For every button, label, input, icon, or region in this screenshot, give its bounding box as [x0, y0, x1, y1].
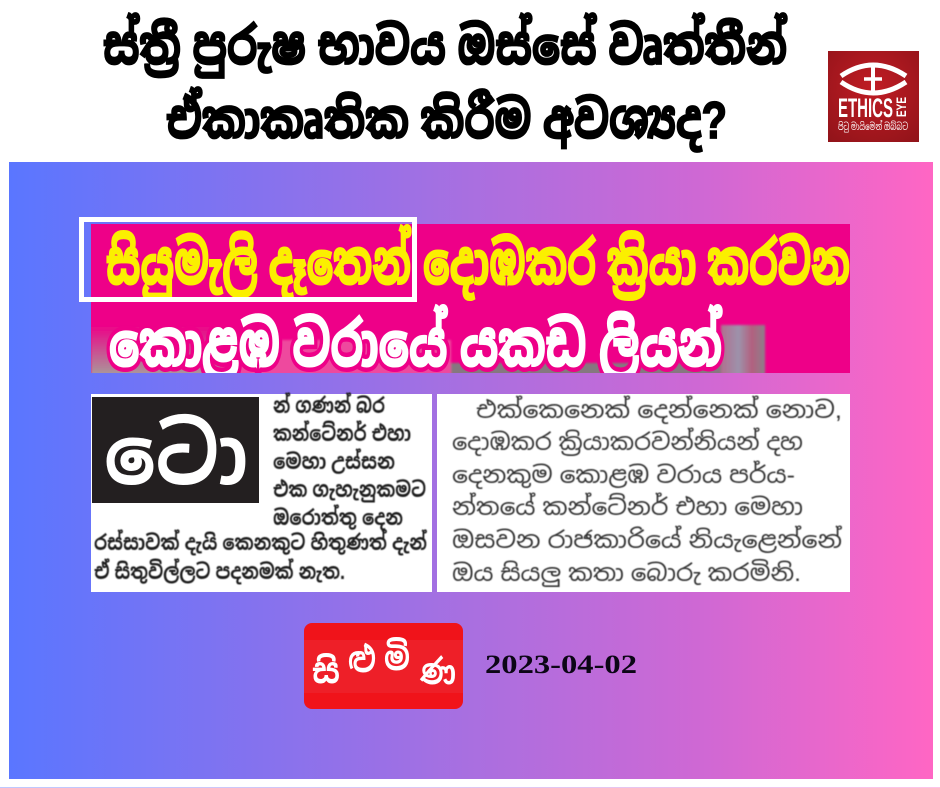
- article text: ඒ සිතුවිල්ලට පදනමක් නැත.: [94, 558, 345, 585]
- gradient panel: [9, 162, 933, 779]
- logo side word: EYE: [893, 97, 909, 117]
- article text: මෙහා උස්සන: [273, 448, 395, 474]
- headline line 2 outline: කොළඹ වරායේ යකඩ ලියන්: [109, 305, 722, 381]
- newspaper name: මි: [384, 637, 410, 678]
- newspaper name: [312, 637, 456, 692]
- article text: ඔසවන රාජකාරියේ නියැළෙන්නේ: [452, 524, 843, 553]
- article text: එක ගැහැනුකමට: [273, 478, 426, 503]
- article text: ඔරොත්තු දෙන: [273, 504, 403, 531]
- date: 2023-04-02: [485, 650, 637, 679]
- headline line 2: කොළඹ වරායේ යකඩ ලියන්: [109, 305, 722, 381]
- logo: newspaper: [304, 623, 463, 709]
- logo tagline: පිටු මායිමෙන් ඔබ්බට: [838, 120, 908, 133]
- article text: න්තයේ කන්ටේනර් එහා මෙහා: [452, 491, 803, 520]
- article text: න් ගණන් බර: [273, 392, 385, 418]
- headline line 1: සියුමැලි දෑතෙන්: [106, 225, 411, 300]
- logo: Ethics Eye: [828, 51, 919, 142]
- highlight box: [82, 220, 414, 300]
- article text: රස්සාවක් දැයි කෙනකුට හිතුණත් දැන්: [94, 529, 427, 556]
- article text: ඔය සියලු කතා බොරු කරමිනි.: [452, 559, 801, 587]
- title: ඒකාකෘතික කිරීම අවශ්‍යද?: [166, 87, 727, 152]
- headline background: [91, 224, 850, 373]
- bottom strip: [0, 787, 940, 788]
- icon: eye: [841, 65, 906, 93]
- title: [103, 13, 787, 152]
- article text: කන්ටේනර් එහා: [273, 420, 411, 446]
- headline line 1: [106, 225, 850, 300]
- article text: දොඹකර ක්‍රියාකරවන්නියන් දහ: [452, 426, 803, 456]
- article text: [94, 392, 427, 585]
- article text: එක්කෙනෙක් දෙන්නෙක් නොව,: [476, 394, 842, 424]
- newspaper name: ළු: [348, 642, 376, 680]
- blurred photo strip: [91, 325, 765, 375]
- newspaper name: සි: [312, 652, 340, 691]
- drop cap: ටො: [104, 408, 248, 502]
- panel: left article: [91, 392, 432, 592]
- newspaper name: ණ: [419, 654, 456, 692]
- article text: දෙනකුම කොළඹ වරාය පර්ය-: [452, 459, 795, 489]
- logo wordmark: ETHICS: [838, 93, 893, 123]
- article text: [452, 394, 843, 587]
- title: ස්ත්‍රී පුරුෂ භාවය ඔස්සේ වෘත්තීන්: [103, 13, 787, 78]
- headline clipping: [91, 224, 850, 381]
- panel: right article: [437, 394, 850, 592]
